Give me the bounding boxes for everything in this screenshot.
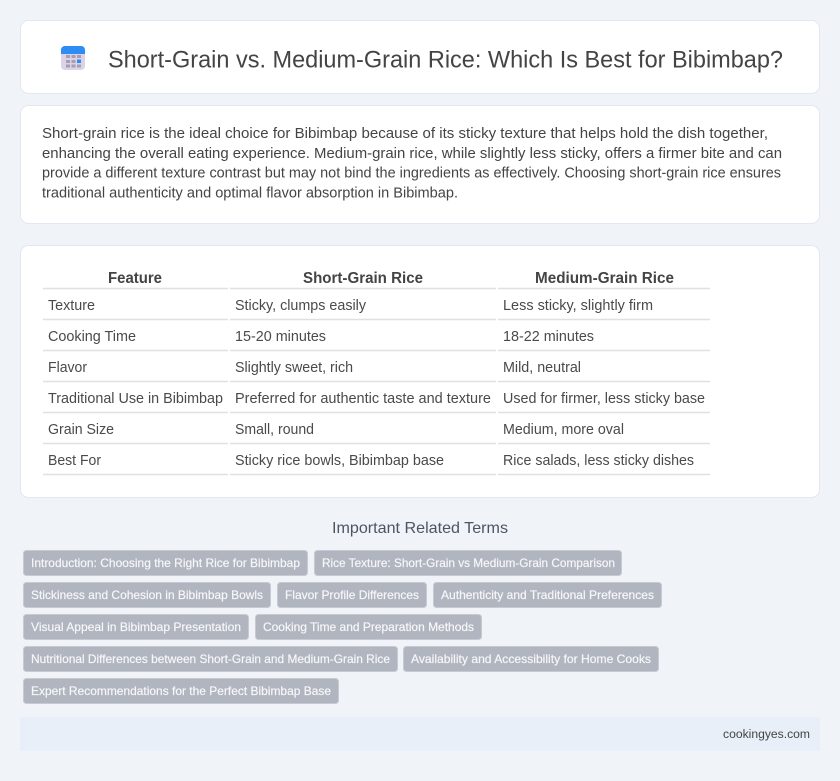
table row: cooking time: 15-20 minutes	[235, 329, 326, 345]
tag: Availability and Accessibility for Home Cooks	[411, 652, 651, 666]
table row: grain size: Grain Size	[48, 422, 114, 438]
table row: best for	[43, 453, 710, 474]
tag: Expert Recommendations for the Perfect Bibimbap Base	[31, 684, 331, 698]
tag: Cooking Time and Preparation Methods	[263, 620, 474, 634]
table row: grain size: Medium, more oval	[503, 422, 624, 438]
title: Short-Grain vs. Medium-Grain Rice: Which Is Best for Bibimbap?	[108, 46, 783, 74]
tag	[24, 646, 398, 672]
tag: Rice Texture: Short-Grain vs Medium-Grain Comparison	[322, 556, 615, 570]
table row: flavor: Slightly sweet, rich	[235, 360, 353, 376]
text block: introduction paragraph: traditional authenticity and optimal flavor absorption in Bibimbap.	[42, 186, 458, 202]
tag: Nutritional Differences between Short-Grain and Medium-Grain Rice	[31, 652, 390, 666]
table header: Medium-Grain Rice	[535, 270, 674, 287]
tag	[314, 550, 622, 576]
table row: grain size	[43, 422, 710, 444]
table row: flavor: Flavor	[48, 360, 87, 376]
tag	[24, 614, 248, 640]
tag	[256, 614, 482, 640]
tag: Authenticity and Traditional Preferences	[441, 588, 654, 602]
text block: introduction paragraph: Short-grain rice is the ideal choice for Bibimbap because of its sticky texture that helps hold the dish together,	[42, 126, 768, 142]
table header: Short-Grain Rice	[303, 270, 423, 287]
table row: cooking time	[43, 329, 710, 350]
tag	[24, 582, 270, 608]
text block: introduction paragraph: provide a different texture contrast but may not bind the ingredients as effectively. Choosing short-grain rice ensures	[42, 166, 781, 182]
panel: comparison table	[20, 246, 820, 498]
table row: texture	[43, 298, 710, 320]
panel: header	[20, 20, 820, 94]
table row: texture: Sticky, clumps easily	[235, 298, 367, 314]
table row: traditional use: Preferred for authentic taste and texture	[235, 391, 491, 407]
table row: cooking time: 18-22 minutes	[503, 329, 594, 345]
table row: cooking time: Cooking Time	[48, 329, 136, 345]
table row: flavor: Mild, neutral	[503, 360, 581, 376]
table row: best for: Sticky rice bowls, Bibimbap base	[235, 453, 444, 469]
tag: Flavor Profile Differences	[285, 588, 419, 602]
tag list: related terms	[24, 550, 662, 704]
icon: calendar	[61, 46, 85, 70]
table header	[43, 270, 710, 288]
table row: best for: Rice salads, less sticky dishes	[503, 453, 694, 469]
table row: grain size: Small, round	[235, 422, 314, 438]
tag	[24, 678, 338, 704]
table header: Feature	[108, 270, 162, 287]
tag	[404, 646, 658, 672]
table row: flavor	[43, 360, 710, 382]
panel: introduction	[20, 106, 820, 224]
tag	[434, 582, 662, 608]
tag: Introduction: Choosing the Right Rice for Bibimbap	[31, 556, 300, 570]
table row: traditional use: Used for firmer, less sticky base	[503, 391, 705, 407]
tag	[24, 550, 308, 576]
table row: traditional use: Traditional Use in Bibimbap	[48, 391, 223, 407]
table row: best for: Best For	[48, 453, 101, 469]
tag: Stickiness and Cohesion in Bibimbap Bowls	[31, 588, 263, 602]
table row: traditional use	[43, 391, 710, 412]
heading: related terms: Important Related Terms	[332, 520, 508, 537]
text block: introduction paragraph	[42, 126, 782, 202]
tag: Visual Appeal in Bibimbap Presentation	[31, 620, 241, 634]
footer	[20, 717, 820, 751]
footer source: cookingyes.com	[723, 727, 810, 741]
table row: texture: Texture	[48, 298, 95, 314]
table row: texture: Less sticky, slightly firm	[503, 298, 653, 314]
tag	[278, 582, 426, 608]
text block: introduction paragraph: enhancing the overall eating experience. Medium-grain rice, while slightly less sticky, offers a firmer bite and can	[42, 146, 782, 162]
